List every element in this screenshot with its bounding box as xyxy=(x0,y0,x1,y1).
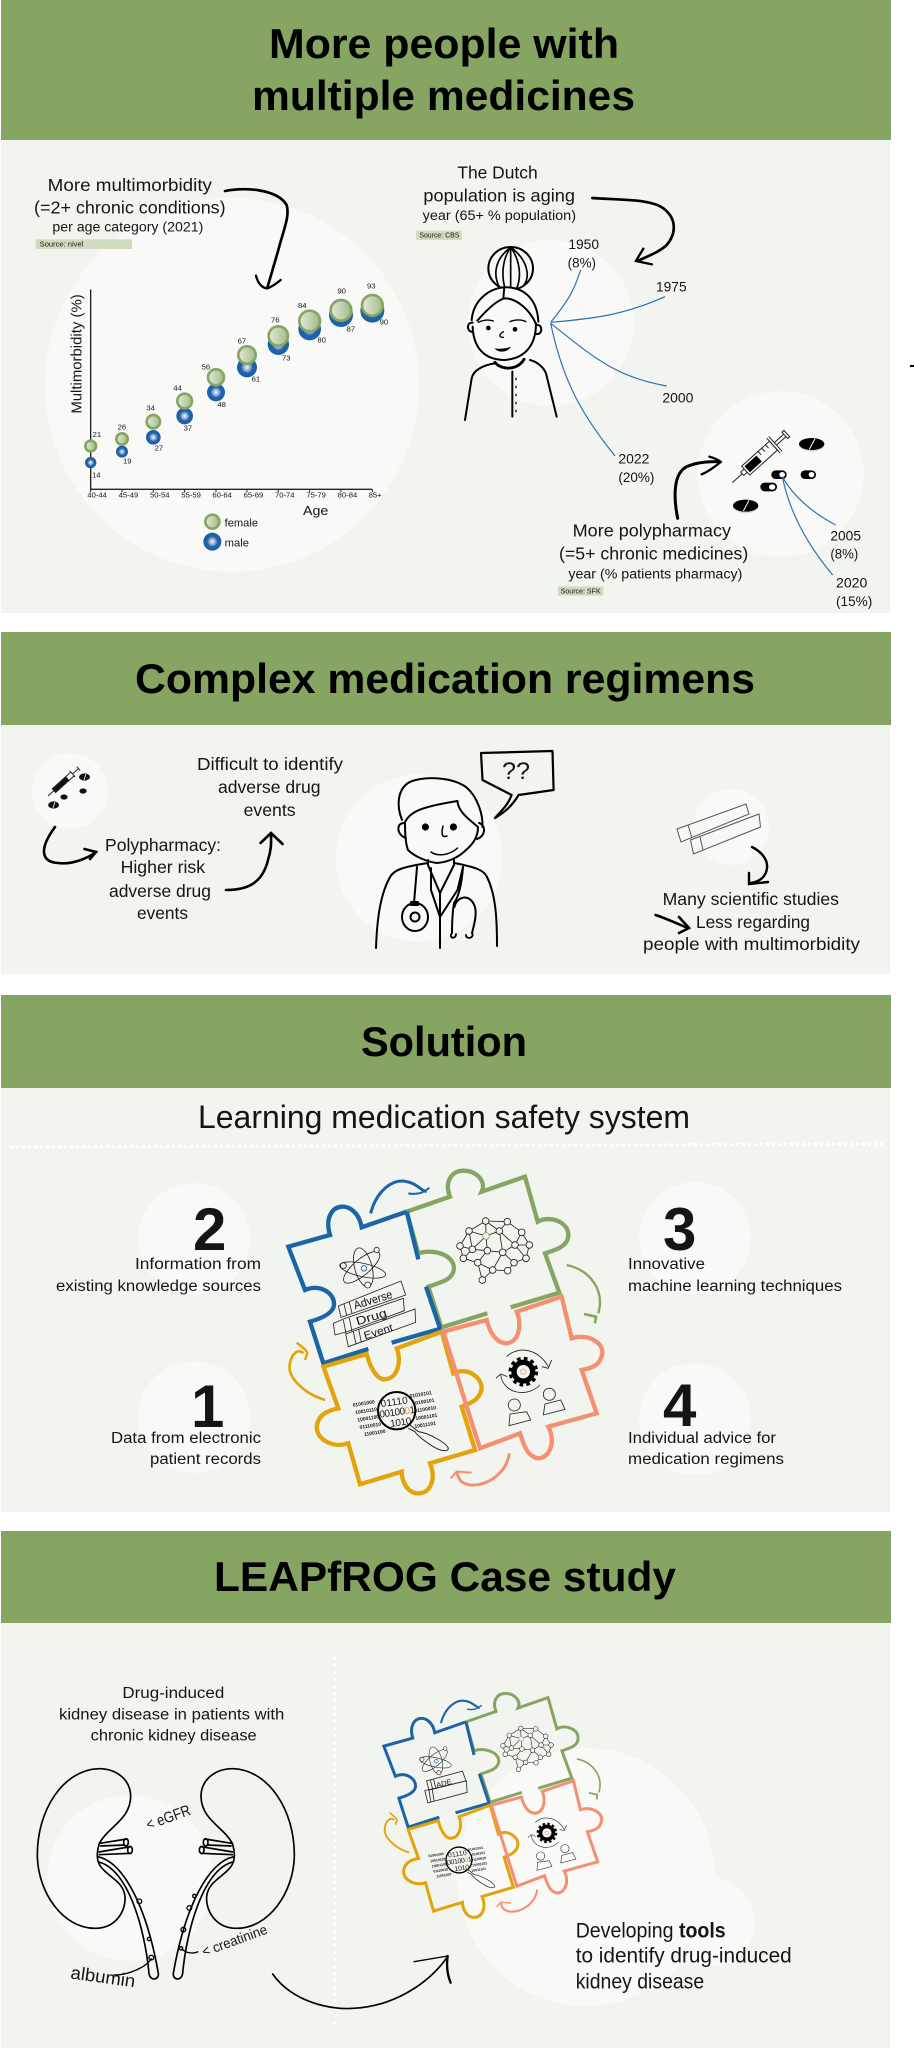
text: polypharmacy higher risk: adverse drug xyxy=(109,881,211,901)
background circle chart xyxy=(45,198,419,572)
source: cbs: Source: CBS xyxy=(419,231,459,240)
binary data small: 01100010 xyxy=(471,1856,487,1862)
step 3: Innovative xyxy=(628,1256,705,1273)
binary data small: 01110010 xyxy=(433,1867,448,1874)
book stack: Event xyxy=(362,1322,395,1342)
source: sfk: Source: SFK xyxy=(561,586,601,595)
binary data small: 01001000 xyxy=(428,1852,444,1858)
value labels: 37 xyxy=(184,423,192,432)
arrow: kidney to puzzle xyxy=(273,1956,451,2009)
step 1: Data from electronic xyxy=(111,1430,261,1447)
chart: multimorbidity by age: 65-69 xyxy=(244,491,263,500)
value labels xyxy=(92,282,388,480)
value labels: 80 xyxy=(317,336,326,345)
value labels: 67 xyxy=(238,336,246,345)
chart: multimorbidity by age: 50-54 xyxy=(150,491,170,500)
binary data: 10001101 xyxy=(415,1413,438,1422)
year labels aging: 2000 xyxy=(662,389,694,405)
year labels aging xyxy=(568,236,694,485)
chart: multimorbidity by age: 60-64 xyxy=(212,491,233,500)
panel: solution xyxy=(1,995,891,1512)
value labels: 27 xyxy=(155,443,163,452)
text: more multimorbidity: More multimorbidity xyxy=(48,175,212,195)
value labels: 19 xyxy=(123,457,132,466)
stray mark xyxy=(910,365,914,367)
text: many scientific studies xyxy=(643,889,860,954)
step 2 xyxy=(56,1196,261,1295)
step 4: 4 xyxy=(663,1372,697,1439)
year labels polypharmacy: (8%) xyxy=(830,546,858,562)
step 3: machine learning techniques xyxy=(628,1278,842,1295)
text: drug-induced kidney disease: chronic kidney disease xyxy=(91,1728,257,1745)
value labels: 84 xyxy=(298,301,307,310)
arrow: polypharmacy to difficult xyxy=(226,833,283,890)
binary data: 01010101 xyxy=(409,1390,432,1400)
text: more polypharmacy: year (% patients pharmacy) xyxy=(568,566,742,581)
text: difficult to identify: Difficult to identify xyxy=(197,754,343,774)
background circle aging xyxy=(468,240,634,406)
subtitle: learning medication safety system: Learning medication safety system xyxy=(198,1099,690,1135)
binary data small: 11001100 xyxy=(436,1872,452,1879)
text: more polypharmacy: (=5+ chronic medicines) xyxy=(559,544,748,564)
text: many scientific studies: people with multimorbidity xyxy=(643,934,860,954)
icon: right kidney xyxy=(173,1769,294,1979)
chart: multimorbidity by age: 85+ xyxy=(369,491,382,500)
binary data: 10011101 xyxy=(414,1421,437,1430)
aging and polypharmacy group xyxy=(416,163,872,609)
arrow to chart xyxy=(225,189,288,288)
text: developing tools: Developing tools xyxy=(576,1919,726,1942)
legend: female xyxy=(225,518,258,530)
magnified binary small: 01110 xyxy=(448,1850,467,1860)
number circles xyxy=(138,1182,751,1475)
binary data small: 10011101 xyxy=(471,1867,487,1873)
year labels aging: 1950 xyxy=(568,236,599,252)
chart: multimorbidity by age: Age xyxy=(303,503,328,518)
binary data small: 10010110 xyxy=(430,1857,446,1863)
legend xyxy=(203,515,258,551)
value labels: 90 xyxy=(337,286,346,295)
binary data small xyxy=(428,1845,488,1879)
text: drug-induced kidney disease: Drug-induced xyxy=(122,1685,224,1702)
book stack: Drug xyxy=(354,1307,388,1328)
value labels: 93 xyxy=(367,282,376,291)
arrow: books to studies xyxy=(749,847,768,884)
header band 2 xyxy=(1,632,891,725)
chart: multimorbidity by age: 80-84 xyxy=(338,491,358,500)
background circles xyxy=(32,753,769,942)
magnified binary small xyxy=(446,1849,474,1874)
text: developing tools: to identify drug-induced xyxy=(576,1945,792,1968)
value labels: 14 xyxy=(92,471,101,480)
icon: syringe and pills xyxy=(726,426,824,513)
chart: multimorbidity by age xyxy=(70,282,388,551)
value labels: 87 xyxy=(347,324,355,333)
header band 1 xyxy=(1,0,891,140)
text: developing tools xyxy=(576,1919,792,1993)
arrow: pills to polypharmacy xyxy=(44,827,96,863)
binary data: 10100101 xyxy=(412,1398,435,1407)
label: creatinine: < creatinine xyxy=(200,1921,269,1959)
step 1: 1 xyxy=(191,1373,224,1440)
value labels: 90 xyxy=(380,318,388,327)
panel: more people with multiple medicines xyxy=(1,0,891,613)
title: leapfrog case study: LEAPfROG Case study xyxy=(214,1553,677,1600)
year lines polypharmacy xyxy=(782,477,836,575)
label: albumin: albumin xyxy=(69,1962,137,1991)
title: more people with multiple medicines xyxy=(252,20,635,119)
step 3: 3 xyxy=(663,1196,696,1263)
step 1 xyxy=(111,1373,261,1468)
book stack small: ADE xyxy=(435,1777,453,1790)
speech bubble xyxy=(481,751,554,818)
chart: multimorbidity by age: 70-74 xyxy=(275,491,295,500)
magnified binary: 01110 xyxy=(380,1395,409,1410)
magnified binary: 0010001 xyxy=(379,1405,416,1421)
step 4: Individual advice for xyxy=(628,1430,776,1447)
chart: multimorbidity by age: 55-59 xyxy=(181,491,201,500)
text: the dutch population is aging: The Dutch xyxy=(457,163,538,183)
value labels: 26 xyxy=(118,422,126,431)
step 2: existing knowledge sources xyxy=(56,1278,261,1295)
kidney illustration group xyxy=(37,1685,451,2009)
binary data: 01100010 xyxy=(414,1405,437,1415)
value labels: 73 xyxy=(282,354,291,363)
text: more multimorbidity: per age category (2021) xyxy=(52,220,203,235)
source: nivel: Source: nivel xyxy=(40,240,84,249)
year labels polypharmacy: 2005 xyxy=(830,527,861,543)
arrow: less regarding xyxy=(656,915,689,933)
binary data: 01110010 xyxy=(359,1422,382,1431)
icon: mini syringe and pills xyxy=(45,766,90,809)
text: drug-induced kidney disease: kidney disease in patients with xyxy=(59,1706,284,1723)
book stack xyxy=(333,1281,416,1347)
book stack small xyxy=(425,1771,467,1803)
text: difficult to identify xyxy=(197,754,343,820)
text: developing tools: kidney disease xyxy=(576,1970,704,1993)
value labels: 34 xyxy=(146,404,156,413)
text: drug-induced kidney disease xyxy=(59,1685,284,1745)
header band 4 xyxy=(1,1531,891,1623)
value labels: 76 xyxy=(271,316,280,325)
arrow to aging xyxy=(592,198,674,264)
multimorbidity heading and chart xyxy=(34,175,388,551)
arrow to pills xyxy=(675,457,721,518)
icon: doctor xyxy=(376,778,497,948)
step 3 xyxy=(628,1196,842,1295)
text: difficult to identify: adverse drug xyxy=(218,777,320,797)
label: egfr: < eGFR xyxy=(144,1802,193,1834)
value labels: 48 xyxy=(217,400,226,409)
magnified binary xyxy=(377,1395,418,1431)
background circle polypharmacy xyxy=(698,391,864,557)
title: solution: Solution xyxy=(361,1018,527,1065)
title: complex medication regimens: Complex medication regimens xyxy=(135,655,755,702)
text: polypharmacy higher risk xyxy=(105,835,221,923)
label: albumin xyxy=(71,1958,152,1988)
chart: multimorbidity by age: 75-79 xyxy=(306,491,326,500)
text: many scientific studies: Many scientific studies xyxy=(663,889,839,909)
text: polypharmacy higher risk: Polypharmacy: xyxy=(105,835,221,855)
chart: multimorbidity by age: Multimorbidity (%) xyxy=(70,294,86,414)
eyes of doctor xyxy=(422,823,457,831)
puzzle: case study tools xyxy=(384,1693,602,1917)
magnified binary small: 1010 xyxy=(454,1864,470,1873)
speech bubble: ?? xyxy=(502,758,530,785)
legend: male xyxy=(225,538,249,550)
binary data: 10010110 xyxy=(355,1407,378,1416)
title: more people with multiple medicines: More people with xyxy=(269,20,619,67)
year lines aging xyxy=(551,270,667,456)
magnified binary: 1010 xyxy=(390,1416,413,1430)
background circles xyxy=(47,1748,755,2006)
year labels polypharmacy xyxy=(830,527,872,609)
step 2: 2 xyxy=(193,1196,226,1263)
text: difficult to identify: events xyxy=(244,800,296,820)
value labels: 21 xyxy=(93,430,101,439)
value labels: 56 xyxy=(202,362,210,371)
male bubbles xyxy=(85,299,384,468)
book stack: Adverse xyxy=(352,1288,394,1312)
icon: older woman xyxy=(465,247,557,420)
text: polypharmacy higher risk: events xyxy=(137,903,188,923)
value labels: 61 xyxy=(252,375,260,384)
panel: leapfrog case study xyxy=(1,1531,891,2048)
binary data: 01001000 xyxy=(352,1399,375,1409)
binary data small: 01010101 xyxy=(468,1846,484,1852)
text: more multimorbidity xyxy=(34,175,226,235)
step 4: medication regimens xyxy=(628,1451,784,1468)
step 4 xyxy=(628,1372,784,1468)
value labels: 44 xyxy=(173,384,183,393)
magnified binary small: 0010001 xyxy=(447,1856,473,1867)
chart: multimorbidity by age: 40-44 xyxy=(87,491,108,500)
binary data: 10001100 xyxy=(357,1414,380,1424)
header band 3 xyxy=(1,995,891,1088)
text: more multimorbidity: (=2+ chronic conditions) xyxy=(34,197,226,217)
year labels aging: 1975 xyxy=(656,278,687,294)
step 2: Information from xyxy=(135,1256,261,1273)
binary data xyxy=(352,1390,439,1439)
year labels polypharmacy: 2020 xyxy=(836,575,868,591)
year labels aging: (8%) xyxy=(568,254,596,270)
chart: multimorbidity by age: 45-49 xyxy=(119,491,138,500)
source: nivel xyxy=(36,239,132,249)
year labels polypharmacy: (15%) xyxy=(836,593,872,609)
female bubbles xyxy=(85,295,383,451)
text: polypharmacy higher risk: Higher risk xyxy=(121,857,205,877)
panel: complex medication regimens xyxy=(1,632,891,974)
binary data small: 10001100 xyxy=(431,1862,447,1869)
year labels aging: (20%) xyxy=(618,469,654,485)
binary data small: 10100101 xyxy=(470,1851,486,1857)
text: the dutch population is aging: population is aging xyxy=(423,186,575,206)
title: more people with multiple medicines: multiple medicines xyxy=(252,72,635,119)
text: the dutch population is aging: year (65+ % population) xyxy=(423,208,576,223)
binary data small: 10001101 xyxy=(472,1861,488,1868)
step 1: patient records xyxy=(150,1451,261,1468)
icon: books xyxy=(677,804,760,854)
year labels aging: 2022 xyxy=(618,451,650,467)
icon: left kidney xyxy=(37,1769,158,1979)
text: more polypharmacy: More polypharmacy xyxy=(573,521,731,541)
text: the dutch population is aging xyxy=(423,163,576,223)
puzzle: learning system xyxy=(288,1171,602,1493)
binary data: 11001100 xyxy=(364,1429,386,1438)
text: many scientific studies: Less regarding xyxy=(696,912,810,932)
text: more polypharmacy xyxy=(559,521,748,581)
